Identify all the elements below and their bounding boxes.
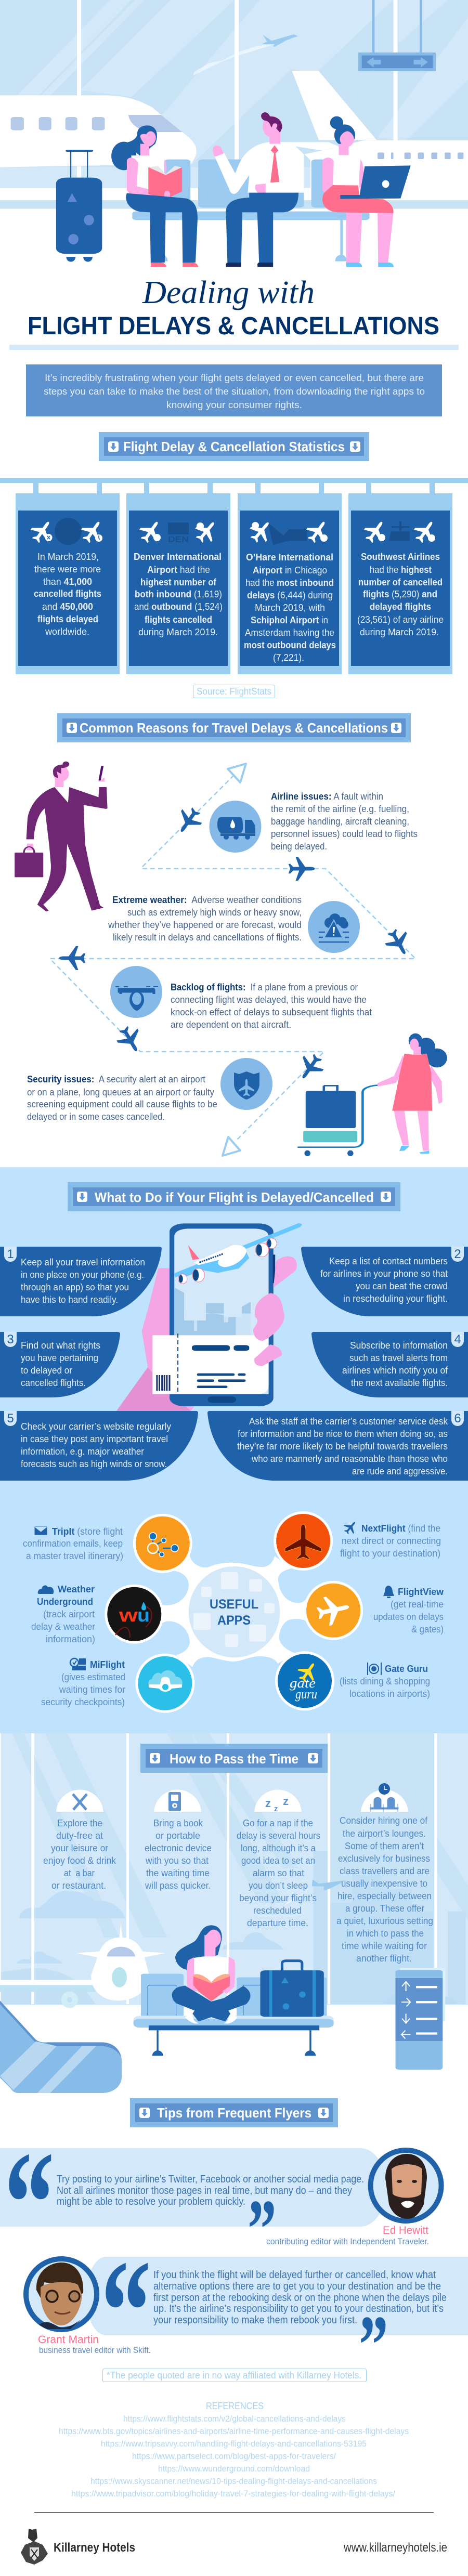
avatar: Ed Hewitt [371,2150,441,2221]
text: go for a nap: good idea to set an [241,1855,315,1866]
panel: quote Ed Hewitt: contributing editor with Independent Traveler. [266,2237,429,2246]
icon: plane on phone [175,1224,302,1284]
text: bring a book: or portable [155,1830,200,1841]
panel: quote Ed Hewitt: Ed Hewitt [383,2225,428,2237]
text: bring a book: the waiting time [146,1868,210,1878]
panel: step 1 [0,1247,162,1316]
text: MiFlight: (gives estimated [61,1672,125,1682]
panel: quote Grant Martin: up. It’s the airline’s responsibility to get you to your destination, but it’s [153,2303,444,2315]
panel: step 1: in one place on your phone (e.g. [21,1270,144,1280]
panel: step 6: they’re far more likely to be helpful towards travellers [237,1441,448,1452]
text: TripIt [23,1526,123,1561]
panel: quote Ed Hewitt: ” [248,2183,277,2276]
text: extreme weather [108,895,302,943]
website: www.killarneyhotels.ie [343,2541,447,2555]
panel: stat card Southwest: had the highest [370,565,432,575]
icon: plane and contrail [269,1879,346,1927]
text: airline issues [271,791,418,852]
text: bring a book: will pass quicker. [145,1880,211,1891]
person: woman with laptop [322,116,411,267]
text: bring a book: electronic device [145,1843,212,1853]
hand fingers [253,1257,297,1366]
panel: step 4: the next available flights. [351,1378,448,1388]
panel: stat card Denver: during March 2019. [138,627,218,637]
heading: tips: Tips from Frequent Flyers [157,2105,311,2121]
dashed flight path with arrow heads [50,764,415,1156]
text: airline issues: baggage handling, aircraft cleaning, [271,816,409,827]
panel: quote Ed Hewitt: “ [4,2121,54,2285]
icon: dome with zzz: z [265,1797,271,1810]
text: Gate Guru: Gate Guru [385,1664,428,1674]
text: MiFlight [41,1658,125,1707]
text: extreme weather: whether they’ve happened or are forecast, would [108,920,302,930]
panel: stat card Southwest: delayed flights [370,601,431,612]
text: consider hiring a lounge: a group. These offer [345,1903,424,1914]
logo: Killarney Hotels [21,2529,135,2565]
center label: useful apps [210,1597,258,1628]
parked plane, right with tail [292,71,468,200]
panel: step 1: through an app) so that you [21,1282,129,1292]
intro text block: It’s incredibly frustrating when your flight gets delayed or even cancelled, but there are [45,373,424,383]
text: MiFlight: security checkpoints) [41,1697,125,1707]
text: consider hiring a lounge: the airport’s lounges. [343,1828,426,1839]
text: FlightView: updates on delays [373,1612,444,1622]
panel: quote Grant Martin: “ [101,2230,151,2393]
bench [132,160,370,261]
text: Gate Guru [340,1663,430,1699]
text: NextFlight: NextFlight (find the [361,1523,440,1534]
panel: step 3: 3 [7,1332,14,1346]
text: consider hiring a lounge: class travellers and are [340,1866,430,1876]
panel: stat card Denver: flights cancelled [145,614,212,625]
references: https://www.bts.gov/topics/airlines-and-airports/airline-time-performance-and-causes-flight-delays [59,2426,409,2436]
text: backlog of flights [171,982,372,1030]
text: consider hiring a lounge: hire, especially between [337,1891,432,1901]
references: https://www.partselect.com/blog/best-apps-for-travelers/ [132,2451,336,2461]
panel: step 3: you have pertaining [21,1353,98,1363]
references: https://www.skyscanner.net/news/10-tips-dealing-flight-delays-and-cancellations [90,2476,377,2486]
panel: step 6 [207,1411,468,1481]
text: consider hiring a lounge: usually inexpensive to [341,1878,427,1889]
intro text block [26,364,442,416]
panel: stat card Southwest: Southwest Airlines [361,552,440,562]
text: FlightView [373,1586,444,1634]
panel: step 6: for information and be nice to them when doing so, as [238,1429,448,1439]
panel: stat card worldwide: flights delayed [37,614,98,624]
logo: Killarney Hotels: Killarney Hotels [54,2541,135,2555]
icon: dome with cutlery [56,1789,103,1812]
hanging direction sign [358,0,436,71]
panel: step 2: Keep a list of contact numbers [329,1256,448,1266]
icon: Denver airport with planes [136,516,222,547]
text: NextFlight [340,1518,441,1559]
text: NextFlight: flight to your destination) [340,1548,440,1559]
icon: security shield circle [220,1058,272,1110]
icon: storm warning circle [308,901,360,953]
panel: step 6: are rude and aggressive. [352,1466,448,1476]
text: consider hiring a lounge [336,1815,433,1964]
panel: step 3: Find out what rights [21,1340,100,1351]
intro text block: knowing your consumer rights. [166,400,302,410]
panel: quote Grant Martin: alternative options there are to get you to your destination and be the [153,2281,441,2292]
references: https://www.tripadvisor.com/blog/holiday-travel-7-strategies-for-dealing-with-flight-delays/ [71,2489,395,2499]
panel: step 4: such as travel alerts from [349,1353,448,1363]
app circle: TripIt [133,1514,192,1573]
text: bring a book: with you so that [145,1855,209,1866]
app circle: MiFlight [135,1654,194,1713]
panel: step 2: 2 [454,1247,461,1261]
text: bring a book: Bring a book [153,1818,203,1828]
person: girl reading [172,1925,251,2023]
text: MiFlight: MiFlight [90,1659,125,1670]
heading: how to pass the time: How to Pass the Time [170,1751,298,1767]
icon: small plane [341,1518,360,1537]
text: Weather Underground: information) [46,1634,95,1644]
text: FlightView: (get real-time [391,1599,444,1610]
panel: step 2: you can beat the crowd [356,1281,448,1291]
icon: plane in the sky [193,34,298,75]
useful apps diagram [160,1554,307,1667]
text: go for a nap: alarm so that [253,1868,304,1878]
panel: quote Grant Martin: business travel editor with Skift. [39,2345,151,2355]
panel: stat card O'Hare: O’Hare International [246,552,333,563]
references: https://www.wunderground.com/download [158,2464,310,2474]
icon: envelope [34,1526,47,1535]
seat in foreground [0,2000,122,2093]
panel: step 4 [311,1332,468,1397]
title [28,275,439,340]
app circle: Weather Underground: u [137,1604,150,1626]
panel: stat card Denver [126,493,230,674]
icon: small planes along the path [59,803,415,1085]
panel: quote Grant Martin: Grant Martin [38,2334,99,2346]
direction signpost [396,1968,445,2070]
text: NextFlight: next direct or connecting [342,1536,441,1546]
text: consider hiring a lounge: in which to pass the [347,1928,424,1939]
panel: quote Ed Hewitt: might be able to resolve your problem quickly. [57,2196,245,2207]
text: TripIt: confirmation emails, keep [23,1538,123,1549]
heading: what to do: What to Do if Your Flight is Delayed/Cancelled [95,1189,374,1205]
panel: step 6: who are mannerly and reasonable than those who [251,1454,448,1464]
person: woman with luggage trolley [297,1034,447,1156]
panel: stat card Denver: and outbound (1,524) [134,601,223,612]
text: airline issues: Airline issues: A fault within [271,791,383,802]
panel: stat card worldwide: cancelled flights [34,589,101,599]
text: go for a nap: delay is several hours [237,1830,320,1841]
panel: step 6: Ask the staff at the carrier’s customer service desk [249,1416,448,1427]
text: Weather Underground [31,1584,95,1644]
center label: useful apps: USEFUL [210,1597,258,1612]
panel: quote Ed Hewitt: Try posting to your airline’s Twitter, Facebook or another social media page. [57,2174,364,2185]
panel: stat card O'Hare: delays (6,444) during [247,590,333,600]
panel: stat card Denver: Denver International [134,552,222,562]
panel: stat card worldwide: In March 2019, [37,552,99,562]
panel: stat card Southwest: number of cancelled [358,577,443,587]
app circle: Weather Underground: w [119,1604,138,1626]
heading: common reasons [57,713,411,742]
heading: what to do [68,1182,400,1211]
heading: common reasons: Common Reasons for Travel Delays & Cancellations [80,720,388,736]
text: backlog of flights: knock-on effect of delays to subsequent flights that [171,1007,372,1017]
panel: step 3: to delayed or [21,1365,72,1376]
panel: step 1: Keep all your travel information [21,1257,145,1267]
text: consider hiring a lounge: Consider hiring one of [340,1815,428,1826]
icon: plane front view [0,1923,166,2008]
person: woman reading [111,125,198,267]
text: explore: at a bar [64,1868,95,1878]
icon: cloud [38,1586,54,1594]
text: Weather Underground: Underground [37,1597,93,1607]
panel: stat card O'Hare: Amsterdam having the [245,627,334,638]
source note: Source: FlightStats [197,686,271,697]
icon: bell [383,1586,394,1598]
text: FlightView: FlightView [398,1587,444,1597]
suitcase [261,1961,324,2017]
app circle: NextFlight [274,1511,333,1571]
illustration: phone with plane, boarding pass and hand [116,1223,302,1411]
intro text block: steps you can take to make the best of the situation, from downloading the right apps to [44,386,425,397]
text: FlightView: & gates) [411,1624,444,1634]
icon: dome with zzz [254,1789,302,1813]
seats [134,1974,334,2056]
text: security issues [27,1074,217,1122]
icon: airline with planes [360,516,440,546]
text: backlog of flights: Backlog of flights: If a plane from a previous or [171,982,358,992]
icon: plate and cutlery [368,1663,381,1675]
panel: stat card worldwide [16,493,120,674]
panel: step 2 [301,1247,468,1316]
panel: step 6: 6 [454,1411,461,1426]
panel: step 5: forecasts such as high winds or snow. [21,1459,167,1469]
references: https://www.tripsavvy.com/handling-flight-delays-and-cancellations-53195 [101,2439,367,2449]
panel: step 1: 1 [7,1247,14,1261]
panel: stat card worldwide: there were more [34,564,101,574]
panel: stat card O'Hare: (7,221). [273,652,304,663]
icon: fuel truck circle [209,801,261,853]
text: Gate Guru: locations in airports) [349,1689,430,1699]
heading: statistics: Flight Delay & Cancellation Statistics [123,439,345,454]
panel: step 5: 5 [7,1411,14,1426]
icon: dome with lounge chairs and clock [361,1783,408,1812]
panel: stat card Southwest: flights (5,290) and [363,589,437,599]
text: explore: Explore the [57,1818,102,1828]
text: explore: enjoy food & drink [43,1855,116,1866]
panel: step 4: airlines which notify you of [342,1365,448,1376]
text: security issues: screening equipment could all cause flights to be [27,1099,217,1109]
icon: stopwatch calendar [70,1658,86,1670]
text: security issues: or on a plane, long queues at an airport or faulty [27,1087,214,1097]
hero illustration: airport lounge [0,0,468,267]
panel: step 5: in case they post any important travel [21,1434,168,1444]
text: consider hiring a lounge: a quiet, luxurious setting [336,1916,433,1926]
text: go for a nap: beyond your flight’s [239,1893,317,1903]
panel: how to pass the time backdrop window [0,1733,468,2004]
app circle: Weather Underground [105,1585,164,1644]
panel: step 2: in rescheduling your flight. [343,1293,448,1304]
text: go for a nap: long, although it’s a [241,1843,316,1853]
person: man in shirt and tie [213,112,339,267]
text: consider hiring a lounge: time while waiting for [342,1941,427,1951]
icon: crest [21,2529,48,2565]
title: Dealing with [142,275,315,310]
panel: step 5 [0,1411,198,1481]
icon: O'Hare with planes [246,516,333,547]
panel: quote Grant Martin: your responsibility to make them rebook you first. [153,2315,357,2326]
panel: step 3: cancelled flights. [21,1378,86,1388]
text: security issues: delayed or in some cases cancelled. [27,1112,165,1122]
text: Weather Underground: Weather [58,1584,95,1594]
text: go for a nap: rescheduled [253,1905,302,1916]
boarding pass [152,1333,269,1394]
icon: dome with music player [154,1789,201,1812]
app circle: Gate Guru [275,1651,334,1710]
text: consider hiring a lounge: another flight. [356,1953,412,1964]
panel: what to do section background [0,1167,468,1733]
panel: stat card Southwest: (23,561) of any airline [357,614,444,625]
text: TripIt: TripIt (store flight [52,1526,123,1537]
panel: quote Grant Martin [26,2230,468,2393]
app circle: Gate Guru: guru [295,1686,317,1702]
panel: stat card Southwest: during March 2019. [360,627,439,637]
panel: step 1: have this to hand readily. [21,1294,118,1305]
panel: step 4: Subscribe to information [350,1340,448,1351]
avatar: Grant Martin [26,2259,97,2330]
text: extreme weather: such as extremely high winds or heavy snow, [127,907,302,918]
text: bring a book [145,1818,212,1891]
icon: backlog circle [110,966,162,1018]
text: airline issues: being delayed. [271,841,327,852]
icon: dome with zzz: z [274,1804,278,1813]
person: man with phone and briefcase [15,762,108,911]
text: Weather Underground: (track airport [43,1609,95,1619]
panel: stat card worldwide: than 41,000 [43,577,92,587]
references [59,2401,409,2499]
text: explore: or restaurant. [51,1880,106,1891]
text: consider hiring a lounge: Some of them aren’t [345,1841,424,1851]
center label: useful apps: APPS [217,1613,251,1628]
panel: stat card O'Hare: Schiphol Airport in [251,615,328,625]
text: backlog of flights: connecting flight was delayed, this would have the [171,995,367,1005]
text: go for a nap: Go for a nap if the [243,1818,313,1828]
references: REFERENCES [206,2401,264,2411]
panel: quote Grant Martin: If you think the flight will be delayed further or cancelled, know what [153,2269,436,2281]
panel: quote Ed Hewitt: Not all airlines monitor those pages in real time, but many do – and they [57,2185,352,2196]
panel: step 3 [0,1332,120,1397]
text: extreme weather: Extreme weather: Adverse weather conditions [112,895,302,905]
heading: tips [130,2098,338,2127]
parked plane, left [0,95,197,167]
suitcase [56,150,102,261]
panel: stat card O'Hare [238,493,342,674]
heading: statistics [99,432,369,461]
text: security issues: Security issues: A security alert at an airport [27,1074,205,1084]
text: MiFlight: waiting times for [59,1684,125,1695]
disclaimer note: *The people quoted are in no way affiliated with Killarney Hotels. [107,2370,361,2381]
panel: stat card O'Hare: had the most inbound [245,578,334,588]
app circle: Gate Guru: gate [290,1676,316,1691]
text: go for a nap [237,1818,320,1928]
icon: Denver airport with planes: DEN [168,534,189,544]
panel: stat card worldwide: worldwide. [45,626,89,637]
panel: step 5: Check your carrier’s website regularly [21,1421,171,1432]
text: airline issues: personnel issues) could lead to flights [271,829,418,839]
text: explore: your leisure or [51,1843,108,1853]
panel: quote Ed Hewitt [0,2121,441,2285]
panel: stat card O'Hare: March 2019, with [255,603,325,613]
text: explore: duty-free at [56,1830,103,1841]
app circle: FlightView [304,1581,363,1640]
panel: stat card Southwest [348,493,452,674]
panel: stat card worldwide: and 450,000 [42,601,93,612]
title: FLIGHT DELAYS & CANCELLATIONS [28,312,439,340]
text: extreme weather: likely result in delays and cancellations of flights. [113,932,302,943]
references: https://www.flightstats.com/v2/global-cancellations-and-delays [123,2414,346,2424]
illustration: girl on bench with suitcase, plane, seat and sign [0,1923,468,2093]
icon: globe with planes [27,516,108,546]
panel: step 5: information, e.g. major weather [21,1446,144,1457]
panel: step 2: for airlines in your phone so that [320,1269,448,1279]
text: go for a nap: departure time. [247,1918,308,1928]
heading: how to pass the time [140,1744,328,1773]
text: Weather Underground: delay & weather [31,1622,95,1632]
icon: dome with zzz: z [283,1795,289,1808]
panel: quote Grant Martin: ” [359,2299,388,2392]
text: TripIt: a master travel itinerary) [26,1551,123,1561]
panel: stat card O'Hare: Airport in Chicago [253,565,327,576]
connector rails above stat cards [0,478,468,493]
panel: stat card Denver: Airport had the [147,565,210,575]
text: consider hiring a lounge: exclusively for business [338,1853,430,1864]
text: go for a nap: you don’t sleep [249,1880,308,1891]
panel: step 4: 4 [454,1332,461,1346]
panel: stat card Denver: highest number of [140,577,217,587]
text: backlog of flights: are dependent on that aircraft. [171,1019,291,1030]
text: explore [43,1818,116,1891]
panel: stat card Denver: both inbound (1,619) [135,589,222,599]
text: Gate Guru: (lists dining & shopping [340,1676,430,1686]
text: airline issues: the remit of the airline (e.g. fuelling, [271,804,409,814]
panel: stat card O'Hare: most outbound delays [244,640,336,650]
